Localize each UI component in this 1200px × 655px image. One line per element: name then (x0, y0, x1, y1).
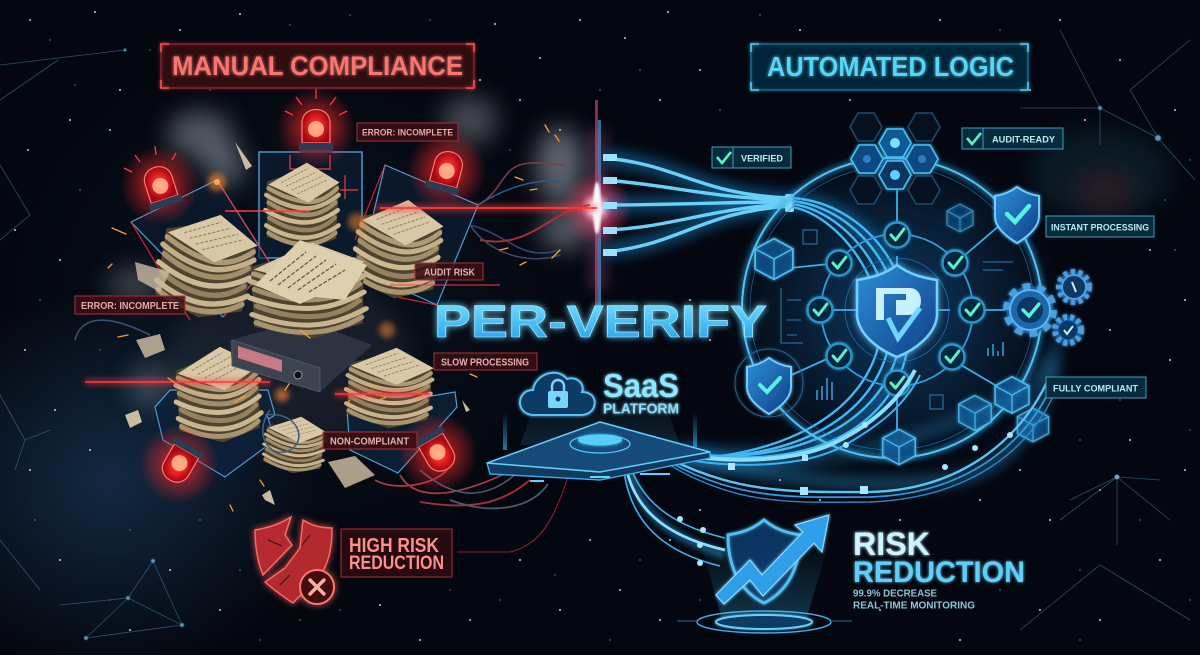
tag: error incomplete top: ERROR: INCOMPLETE (362, 128, 453, 138)
mini charts (781, 230, 1013, 409)
title: automated logic (751, 44, 1028, 90)
alarm beacons (110, 88, 496, 519)
tag: audit risk: AUDIT RISK (424, 268, 476, 278)
label: SaaS platform: PLATFORM (603, 400, 679, 418)
tag: error incomplete left (75, 296, 185, 314)
cable bundle: flare to ring (603, 154, 909, 460)
title: manual compliance: MANUAL COMPLIANCE (172, 51, 463, 81)
text: risk reduction (853, 526, 1025, 589)
cables: platform to risk icon (623, 460, 725, 566)
shield right (995, 187, 1039, 243)
title: automated logic: AUTOMATED LOGIC (767, 51, 1014, 82)
tag: slow processing: SLOW PROCESSING (441, 358, 529, 368)
tag: verified (712, 147, 791, 168)
gears (1007, 272, 1089, 343)
box: lower left (155, 344, 275, 477)
tag: fully compliant (1046, 377, 1146, 398)
box: top (259, 143, 362, 258)
light wall and flare (560, 100, 632, 320)
text: risk reduction: REDUCTION (853, 556, 1025, 589)
connector: high risk to platform (457, 470, 570, 552)
tag: instant processing (1046, 216, 1154, 237)
cables: old world to platform (420, 480, 548, 508)
smoke (107, 96, 589, 450)
shield left (735, 349, 803, 417)
SaaS platform (487, 390, 710, 481)
red laser beams (85, 208, 597, 394)
text: risk reduction: RISK (853, 526, 930, 562)
tag: audit risk (415, 263, 483, 280)
blue glow behind network (725, 140, 1065, 480)
cubes (755, 204, 1049, 464)
tag: verified: VERIFIED (741, 154, 783, 164)
box: lower right (344, 345, 457, 473)
text: risk stats: REAL-TIME MONITORING (853, 600, 975, 612)
panel: manual compliance pile (75, 88, 597, 519)
stack: centre (247, 240, 369, 342)
tag: high risk reduction: HIGH RISK (349, 535, 439, 557)
loose papers (125, 142, 470, 505)
icon: cloud lock (520, 373, 595, 415)
text: risk stats (853, 588, 975, 612)
brand wordmark: PER-VERIFY (434, 296, 767, 347)
tag: instant processing: INSTANT PROCESSING (1051, 222, 1149, 234)
central PV shield (857, 265, 937, 357)
title: manual compliance (161, 44, 474, 88)
tag: slow processing (434, 353, 537, 370)
hexagon cluster (850, 113, 940, 204)
tag: error incomplete top (357, 123, 458, 141)
tag: high risk reduction: REDUCTION (349, 553, 444, 574)
icon: broken shield (255, 517, 334, 604)
cables from right box (75, 163, 590, 493)
tag: error incomplete left: ERROR: INCOMPLETE (81, 301, 179, 312)
sparks (108, 125, 560, 511)
binder (230, 320, 372, 392)
tag: high risk reduction (341, 529, 452, 577)
label: SaaS platform: SaaS (603, 367, 679, 404)
tag: audit-ready: AUDIT-READY (992, 134, 1056, 146)
text: risk stats: 99.9% DECREASE (853, 588, 937, 600)
tag: non-compliant (323, 432, 417, 449)
tag: audit-ready (962, 128, 1063, 149)
tag: fully compliant: FULLY COMPLIANT (1053, 384, 1138, 394)
ring network (742, 158, 1042, 458)
box: left (131, 180, 270, 325)
cables: platform to right (668, 340, 1060, 502)
check nodes (808, 222, 984, 396)
box: right (350, 165, 478, 305)
tag: non-compliant: NON-COMPLIANT (330, 436, 409, 448)
stack: bottom centre (261, 413, 328, 476)
icon: risk reduction hologram (677, 515, 852, 633)
